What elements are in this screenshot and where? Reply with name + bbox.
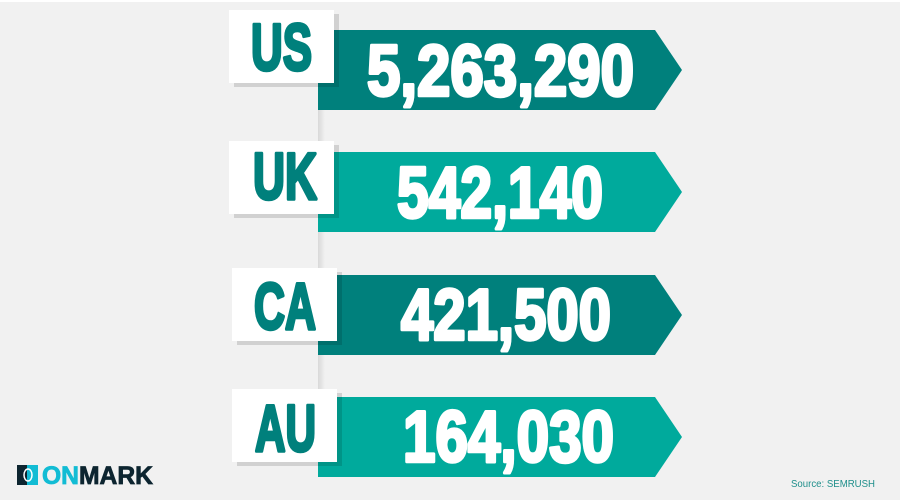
label box: AU xyxy=(232,389,337,462)
value: AU: 164,030 xyxy=(403,398,614,478)
value: UK: 542,140 xyxy=(397,154,603,234)
value: US: 5,263,290 xyxy=(367,32,634,112)
label box: UK xyxy=(229,141,334,214)
label: UK: UK xyxy=(253,139,317,213)
logo wordmark: ONMARK xyxy=(42,462,153,490)
arrow bar: UK xyxy=(318,152,682,232)
logo: ONMARK xyxy=(17,462,153,490)
row: UK xyxy=(229,139,682,234)
label: US: US xyxy=(251,10,312,84)
arrow bar: US xyxy=(318,30,682,110)
source note: Source: SEMRUSH xyxy=(791,478,875,490)
label box: US xyxy=(229,10,334,83)
value: CA: 421,500 xyxy=(401,276,611,356)
icon: logo mark xyxy=(17,465,38,485)
label box: CA xyxy=(232,268,337,341)
row: US xyxy=(229,10,682,112)
row: AU xyxy=(232,389,682,478)
arrow bar: AU xyxy=(318,397,682,477)
label: CA: CA xyxy=(254,269,316,343)
arrow bar: CA xyxy=(318,275,682,355)
label: AU: AU xyxy=(255,391,316,465)
row: CA xyxy=(232,268,682,356)
